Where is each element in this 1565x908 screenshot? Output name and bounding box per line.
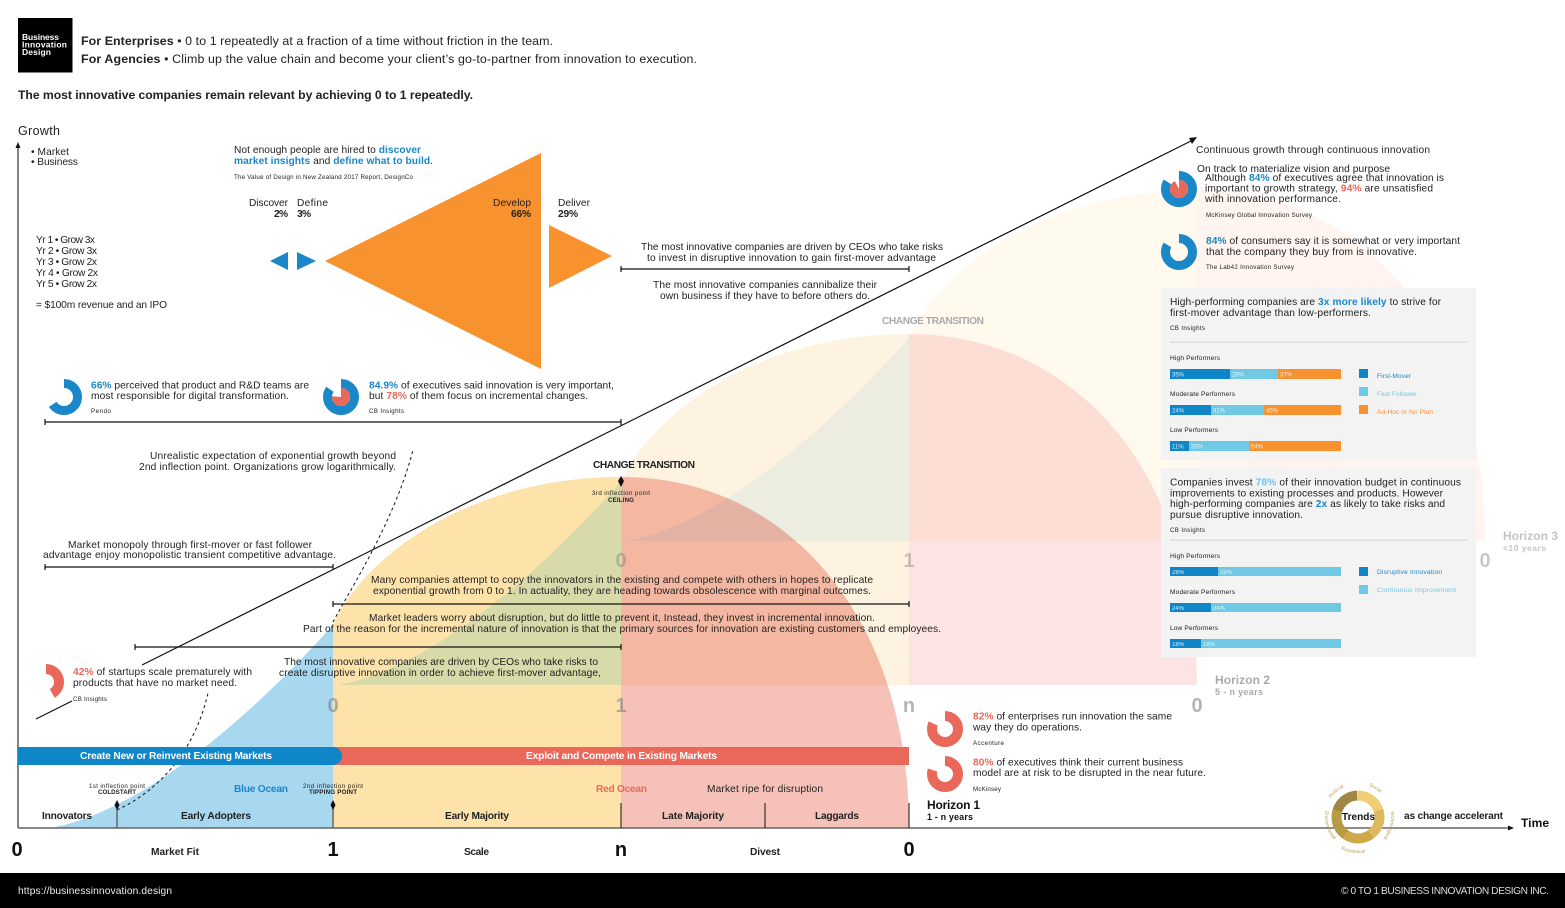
ocean labels: Blue Ocean	[234, 784, 288, 795]
panel: first-mover advantage chart: 35%	[1172, 372, 1185, 378]
horizon digit markers	[327, 550, 1491, 717]
dashed logarithmic curve	[117, 450, 413, 810]
trends ring: Technological	[1384, 810, 1395, 840]
adopter segments: Early Adopters	[181, 811, 251, 822]
disruptive CEOs note	[279, 657, 601, 679]
market bars: Create New or Reinvent Existing Markets	[80, 751, 272, 762]
panel: first-mover advantage chart: High Performers	[1170, 355, 1221, 362]
horizon digit markers: 1	[903, 550, 915, 572]
y axis label: growth	[18, 124, 78, 168]
third inflection point: CEILING	[608, 497, 634, 504]
panel: first-mover advantage chart: 11%	[1172, 444, 1184, 450]
CEO risk note: The most innovative companies are driven by CEOs who take risks	[641, 242, 943, 253]
stat: 82% enterprises: Accenture	[973, 740, 1005, 747]
market leaders note	[135, 613, 941, 650]
inflection point markers	[89, 783, 909, 828]
market leaders note: Part of the reason for the incremental nature of innovation is that the primary sources for innovation are existing customers and employees.	[303, 624, 941, 635]
growth targets text: Yr 2 • Grow 3x	[36, 246, 97, 257]
stat: 82% enterprises	[932, 712, 1172, 747]
x axis stages: Divest	[750, 847, 781, 858]
panel: innovation budget chart: pursue disruptive innovation.	[1170, 510, 1303, 521]
CEO risk note: own business if they have to before others do.	[660, 291, 870, 302]
panel: innovation budget chart: 28%	[1220, 570, 1233, 576]
stat: 84.9% executives: but 78% of them focus on incremental changes.	[369, 391, 588, 402]
CEO risk note	[621, 242, 943, 302]
double diamond chart: 3%	[297, 209, 311, 220]
header intro text: For Agencies • Climb up the value chain and become your client’s go-to-partner from innovation to execution.	[81, 52, 697, 66]
stat: 84.9% executives: CB Insights	[369, 408, 404, 415]
market monopoly note: advantage enjoy monopolistic transient competitive advantage.	[43, 550, 336, 561]
trends caption: as change accelerant	[1404, 811, 1504, 822]
adopter segments: Early Majority	[445, 811, 509, 822]
header intro text: For Enterprises • 0 to 1 repeatedly at a fraction of a time without friction in the team.	[81, 34, 553, 48]
panel: innovation budget chart: 18%	[1172, 642, 1185, 648]
panel: first-mover advantage chart: 35%	[1191, 444, 1204, 450]
horizon 3 curve	[626, 190, 1485, 541]
stat: 66% product and R&D: 66% perceived that product and R&D teams are	[91, 380, 309, 392]
adopter segments: Innovators	[42, 811, 92, 822]
double diamond chart: 2%	[274, 209, 288, 220]
horizon 2 label: 5 - n years	[1215, 687, 1263, 697]
panel: innovation budget chart: Companies invest 78% of their innovation budget in continuous	[1170, 478, 1461, 488]
double diamond note	[234, 145, 433, 181]
growth targets text: Yr 3 • Grow 2x	[36, 257, 97, 268]
disruptive CEOs note: The most innovative companies are driven by CEOs who take risks to	[284, 657, 598, 668]
y axis label: growth: • Business	[31, 157, 78, 168]
double diamond chart	[249, 153, 612, 369]
market monopoly note	[43, 540, 336, 570]
x axis stages: n	[615, 839, 627, 861]
trends ring: Political	[1328, 784, 1344, 798]
CEO risk note: to invest in disruptive innovation to gain first-mover advantage	[647, 253, 936, 264]
disruptive CEOs note: create disruptive innovation in order to achieve first-mover advantage,	[279, 668, 601, 679]
growth targets text: = $100m revenue and an IPO	[36, 300, 167, 311]
copycats note: Many companies attempt to copy the innovators in the existing and compete with others in hopes to replicate	[371, 575, 873, 586]
x axis stages: 1	[327, 839, 339, 861]
panel: first-mover advantage chart: Low Performers	[1170, 427, 1219, 434]
double diamond chart: Define	[297, 198, 328, 209]
horizon 1 label: Horizon 1	[927, 798, 980, 812]
panel: innovation budget chart: improvements to existing processes and products. However	[1170, 488, 1444, 500]
horizon 3 label	[1503, 529, 1558, 553]
panel: first-mover advantage chart: CB Insights	[1170, 325, 1205, 332]
stats: consulting survey 84% and 94%: important to growth strategy, 94% are unsatisfied	[1205, 184, 1433, 194]
adopter segments: Laggards	[815, 811, 859, 822]
panel: first-mover advantage chart: 45%	[1266, 408, 1279, 414]
panel: innovation budget chart: high-performing companies are 2x as likely to take risks and	[1170, 499, 1445, 510]
x axis stages: 0	[11, 839, 23, 861]
footer	[0, 873, 1565, 908]
x axis label: time: Time	[1521, 816, 1549, 830]
horizon 1 curve	[50, 477, 909, 828]
panel: innovation budget chart: Continuous Improvement	[1377, 587, 1456, 594]
stats: consulting survey 84% and 94%: Continuous growth through continuous innovation	[1196, 145, 1430, 156]
panel: first-mover advantage chart: Moderate Performers	[1170, 391, 1236, 398]
growth targets text: Yr 4 • Grow 2x	[36, 268, 98, 279]
inflection point markers: COLDSTART	[98, 789, 136, 796]
panel: innovation budget chart: Low Performers	[1170, 625, 1219, 632]
title: The most innovative companies remain relevant by achieving 0 to 1 repeatedly.	[18, 88, 473, 102]
stat: 80% executives: 80% of executives think their current business	[973, 758, 1183, 768]
stat: 82% enterprises: 82% of enterprises run innovation the same	[973, 712, 1172, 722]
horizon digit markers: 0	[615, 550, 627, 572]
x axis stages	[11, 839, 915, 861]
trends ring: Trends	[1342, 812, 1375, 823]
market leaders note: Market leaders worry about disruption, but do little to prevent it, Instead, they invest in incremental innovation.	[369, 613, 875, 624]
horizon digit markers: 0	[1479, 550, 1491, 572]
growth trajectory arrow	[36, 137, 1197, 719]
horizon 2 label: Horizon 2	[1215, 673, 1270, 687]
stat: 42% startups: CB Insights	[73, 696, 107, 703]
stats: consulting survey 84% and 94%: McKinsey Global Innovation Survey	[1206, 212, 1313, 219]
panel: first-mover advantage chart: Ad-Hoc or No Plan	[1377, 409, 1433, 416]
market monopoly note: Market monopoly through first-mover or fast follower	[68, 540, 313, 551]
stat: 84.9% executives	[328, 380, 614, 415]
horizon 2 label	[1215, 673, 1270, 697]
stat: 80% executives: model are at risk to be disrupted in the near future.	[973, 768, 1206, 779]
panel: first-mover advantage chart: Fast Follower	[1377, 391, 1418, 398]
stat: 84% consumers: The Lab42 Innovation Survey	[1206, 264, 1295, 271]
y axis label: growth: • Market	[31, 147, 69, 158]
unrealistic expectation note: 2nd inflection point. Organizations grow logarithmically.	[139, 462, 396, 473]
stats: consulting survey 84% and 94%: On track to materialize vision and purpose	[1197, 164, 1390, 175]
horizon 3 label: Horizon 3	[1503, 529, 1558, 543]
stat: 84% consumers: that the company they buy from is innovative.	[1206, 247, 1417, 258]
copycats note	[333, 575, 909, 607]
stat: 66% product and R&D: most responsible for digital transformation.	[91, 391, 289, 402]
panel: first-mover advantage chart	[1161, 288, 1476, 460]
panel: first-mover advantage chart: 54%	[1251, 444, 1264, 450]
double diamond chart: Discover	[249, 198, 289, 209]
bracket: horizon 1 market fit to scale	[45, 419, 621, 425]
horizon 1 label: 1 - n years	[927, 812, 973, 822]
double diamond note: Not enough people are hired to discover	[234, 145, 421, 156]
stat: 42% startups	[33, 667, 252, 703]
logo: Innovation	[22, 40, 67, 50]
panel: first-mover advantage chart: first-mover advantage than low-performers.	[1170, 308, 1371, 319]
horizon digit markers: 0	[327, 695, 339, 717]
panel: first-mover advantage chart: 37%	[1280, 372, 1293, 378]
panel: innovation budget chart: CB Insights	[1170, 527, 1205, 534]
footer: https://businessinnovation.design	[18, 886, 172, 897]
trends ring	[1324, 783, 1395, 854]
x axis stages: Market Fit	[151, 847, 200, 858]
stat: 66% product and R&D	[50, 380, 309, 415]
unrealistic expectation note: Unrealistic expectation of exponential growth beyond	[150, 451, 396, 462]
inflection point markers: 1st inflection point	[89, 783, 145, 790]
header intro text	[81, 34, 697, 66]
ocean labels	[234, 784, 823, 795]
growth targets text	[36, 235, 167, 311]
double diamond chart: Deliver	[558, 198, 591, 209]
CEO risk note: The most innovative companies cannibalize their	[653, 280, 878, 291]
market bars: Exploit and Compete in Existing Markets	[526, 751, 717, 762]
copycats note: exponential growth from 0 to 1. In actuality, they are heading towards obsolescence with marginal outcomes.	[373, 586, 871, 597]
panel: innovation budget chart: 28%	[1172, 570, 1185, 576]
horizon digit markers: n	[903, 695, 915, 717]
growth targets text: Yr 5 • Grow 2x	[36, 279, 97, 290]
stat: 66% product and R&D: Pendo	[91, 408, 112, 415]
double diamond chart: Develop	[493, 198, 531, 209]
horizon 3 label: <10 years	[1503, 543, 1546, 553]
logo: Business	[22, 32, 59, 42]
ocean labels: Market ripe for disruption	[707, 784, 823, 795]
stat: 82% enterprises: way they do operations.	[972, 722, 1082, 734]
stats: consulting survey 84% and 94%: with innovation performance.	[1204, 194, 1341, 205]
panel: first-mover advantage chart: 24%	[1172, 408, 1185, 414]
x axis stages: Scale	[464, 847, 489, 858]
third inflection point: 3rd inflection point	[592, 490, 650, 497]
panel: innovation budget chart: High Performers	[1170, 553, 1221, 560]
double diamond chart: 29%	[558, 209, 578, 220]
stat: 80% executives: McKinsey	[973, 786, 1002, 793]
trends ring: Economical	[1341, 846, 1365, 854]
stat: 84.9% executives: 84.9% of executives said innovation is very important,	[369, 380, 614, 392]
stats: consulting survey 84% and 94%	[1166, 145, 1444, 219]
logo	[18, 18, 72, 72]
change transition labels: CHANGE TRANSITION	[882, 316, 984, 327]
panel: first-mover advantage chart: 28%	[1232, 372, 1245, 378]
x axis stages: 0	[903, 839, 915, 861]
panel: first-mover advantage chart: High-performing companies are 3x more likely to strive for	[1170, 297, 1442, 308]
panel: innovation budget chart	[1161, 468, 1476, 657]
inflection point markers: 2nd inflection point	[303, 783, 363, 790]
axes	[16, 142, 1514, 830]
trends ring: Environmental	[1324, 811, 1336, 840]
stats: consulting survey 84% and 94%: Although 84% of executives agree that innovation is	[1205, 173, 1444, 184]
trends ring: Social	[1370, 783, 1382, 793]
third inflection point	[592, 476, 650, 504]
horizon 2 curve	[338, 334, 1197, 685]
panel: first-mover advantage chart: 31%	[1213, 408, 1226, 414]
change transition labels	[593, 316, 984, 471]
inflection point markers: TIPPING POINT	[309, 789, 357, 796]
panel: innovation budget chart: 18%	[1203, 642, 1216, 648]
panel: innovation budget chart: 24%	[1213, 606, 1226, 612]
double diamond note: market insights and define what to build.	[234, 156, 433, 167]
market bars	[18, 747, 909, 765]
horizon digit markers: 1	[615, 695, 627, 717]
ocean labels: Red Ocean	[596, 784, 647, 795]
panel: innovation budget chart: 24%	[1172, 606, 1185, 612]
y axis label: growth: Growth	[18, 124, 60, 138]
horizon digit markers: 0	[1191, 695, 1203, 717]
growth targets text: Yr 1 • Grow 3x	[36, 235, 95, 246]
panel: innovation budget chart: Disruptive Innovation	[1377, 569, 1442, 576]
panel: innovation budget chart: Moderate Performers	[1170, 589, 1236, 596]
stat: 42% startups: products that have no market need.	[73, 678, 237, 689]
footer: © 0 TO 1 BUSINESS INNOVATION DESIGN INC.	[1341, 886, 1549, 897]
change transition labels: CHANGE TRANSITION	[593, 460, 695, 471]
stat: 42% startups: 42% of startups scale prematurely with	[73, 667, 252, 678]
stat: 84% consumers	[1166, 236, 1460, 271]
stat: 80% executives	[932, 758, 1206, 793]
double diamond note: The Value of Design in New Zealand 2017 Report, DesignCo	[234, 174, 414, 181]
panel: first-mover advantage chart: First-Mover	[1377, 373, 1412, 380]
unrealistic expectation note	[139, 451, 396, 473]
stat: 84% consumers: 84% of consumers say it is somewhat or very important	[1206, 236, 1460, 247]
adopter segments	[42, 811, 859, 822]
horizon 1 label	[927, 798, 980, 822]
adopter segments: Late Majority	[662, 811, 724, 822]
double diamond chart: 66%	[511, 209, 531, 220]
logo: Design	[22, 47, 51, 57]
